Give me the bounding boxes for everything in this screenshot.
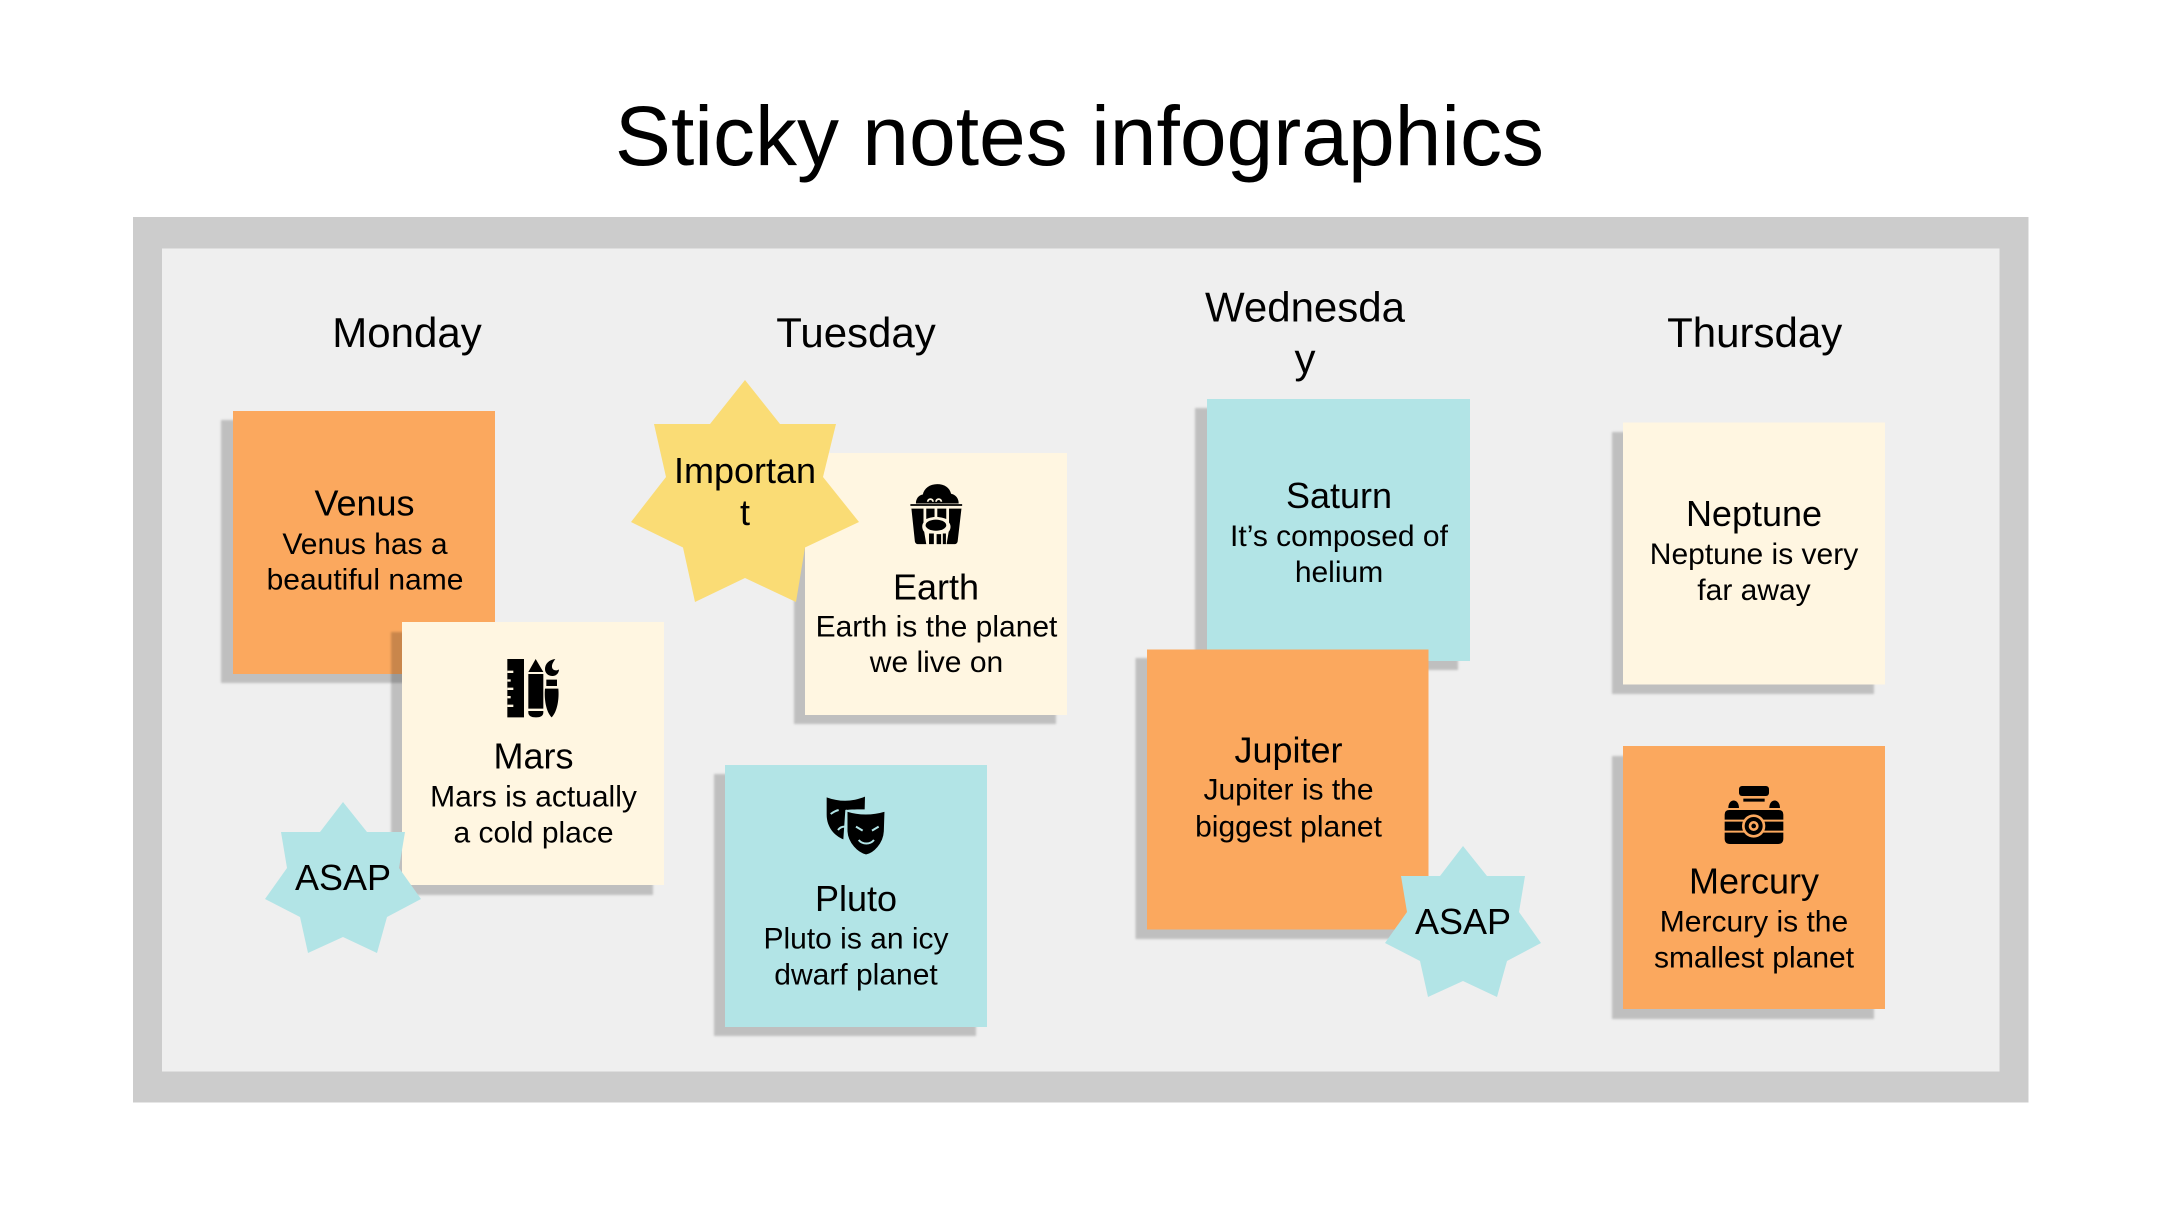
note: Venus: beautiful name <box>267 564 463 596</box>
title: Sticky notes infographics <box>615 89 1544 183</box>
badge: Important star: t <box>740 492 750 533</box>
badge: ASAP star on Monday: ASAP <box>295 857 391 898</box>
board surface <box>162 248 2000 1072</box>
badge: ASAP star on Monday <box>265 802 421 953</box>
heading: Wednesday: Wednesda <box>1205 284 1406 330</box>
badge: Important star <box>631 380 859 602</box>
note: Jupiter: Jupiter is the <box>1203 774 1374 806</box>
note: Saturn <box>1195 399 1470 670</box>
note: Mercury <box>1612 746 1885 1019</box>
note: Jupiter: Jupiter <box>1234 730 1343 770</box>
note: Saturn: It’s composed of <box>1230 520 1449 553</box>
note: Neptune: far away <box>1697 574 1811 607</box>
heading: Thursday: Thursday <box>1667 309 1842 356</box>
note: Mars: a cold place <box>453 816 614 850</box>
heading: Wednesday: y <box>1294 335 1316 382</box>
note: Neptune <box>1612 422 1885 694</box>
note: Neptune: Neptune <box>1686 493 1822 534</box>
icon: art supplies <box>507 659 559 717</box>
note: Mars <box>391 622 664 895</box>
icon: camera <box>1725 786 1783 844</box>
badge: ASAP star on Wednesday: ASAP <box>1415 901 1511 942</box>
note: Earth: Earth is the planet <box>816 610 1058 644</box>
note: Pluto <box>714 765 987 1036</box>
note: Venus: Venus <box>314 482 415 524</box>
heading: Monday: Monday <box>332 309 482 356</box>
note: Venus <box>221 411 495 683</box>
icon: popcorn bucket <box>910 484 962 544</box>
note: Pluto: Pluto <box>815 878 897 919</box>
note: Jupiter: biggest planet <box>1195 810 1383 844</box>
note: Venus: Venus has a <box>282 528 448 561</box>
icon: theatre masks <box>827 797 885 855</box>
note: Pluto: dwarf planet <box>774 958 938 992</box>
note: Mercury: Mercury <box>1689 860 1819 902</box>
note: Mercury: smallest planet <box>1654 942 1855 974</box>
note: Earth: we live on <box>869 646 1003 679</box>
note: Earth <box>794 453 1067 724</box>
badge: Important star: Importan <box>674 450 816 491</box>
board frame <box>133 217 2028 1102</box>
note: Earth: Earth <box>893 566 979 608</box>
note: Neptune: Neptune is very <box>1650 538 1858 571</box>
badge: ASAP star on Wednesday <box>1385 846 1541 997</box>
note: Jupiter <box>1136 650 1428 939</box>
note: Mars: Mars is actually <box>430 780 637 814</box>
heading: Tuesday: Tuesday <box>776 309 936 356</box>
note: Mars: Mars <box>494 736 574 776</box>
note: Mercury: Mercury is the <box>1660 906 1848 938</box>
note: Saturn: helium <box>1295 556 1383 589</box>
note: Saturn: Saturn <box>1286 475 1392 516</box>
note: Pluto: Pluto is an icy <box>763 922 949 956</box>
